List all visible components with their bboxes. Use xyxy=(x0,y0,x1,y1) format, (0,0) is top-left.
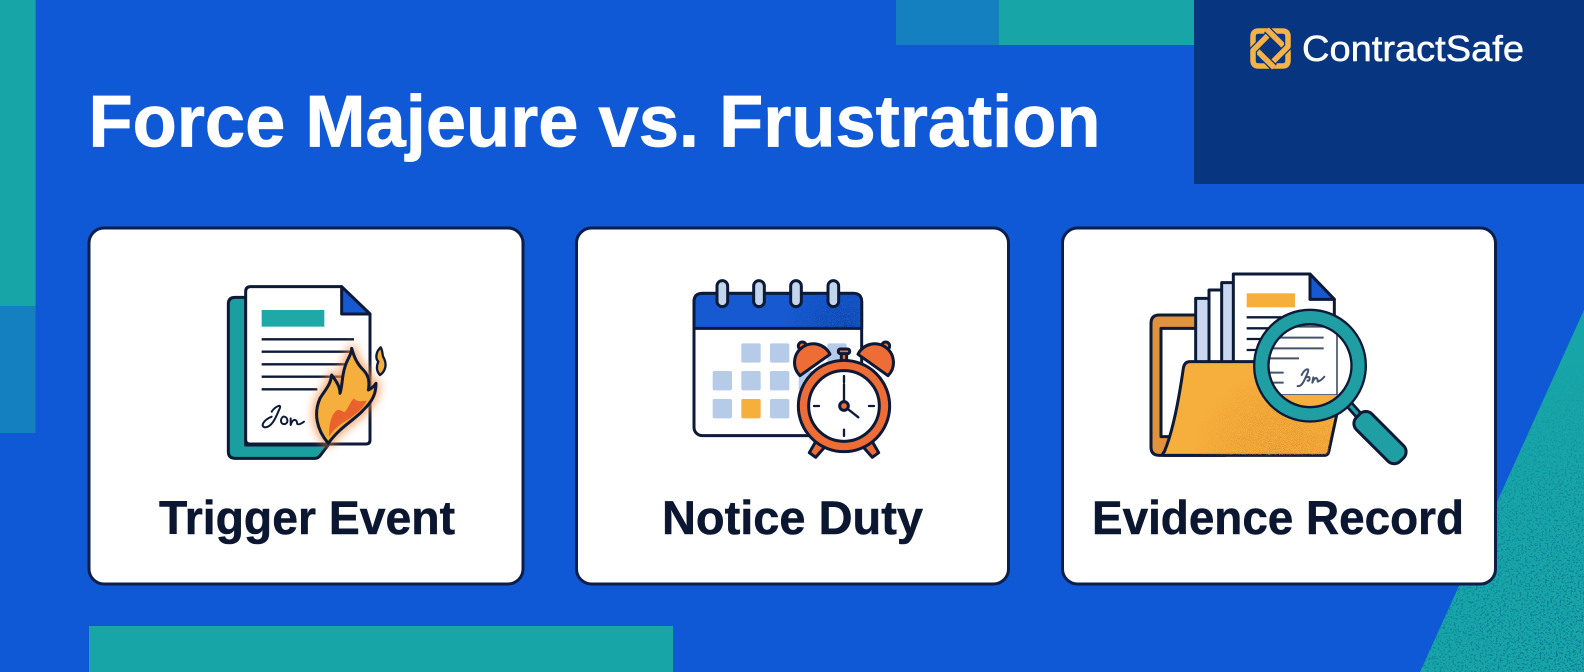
title: Force Majeure vs. Frustration xyxy=(88,82,1100,163)
icon: burning contract xyxy=(228,287,386,458)
panel: notice duty xyxy=(576,228,1008,584)
icon: folder and magnifying glass xyxy=(1151,274,1410,467)
folder front xyxy=(1163,362,1347,455)
icon: calendar and alarm clock xyxy=(694,281,893,457)
logo wordmark: ContractSafe xyxy=(1302,28,1524,69)
panel: evidence record xyxy=(1062,228,1496,584)
folder back xyxy=(1151,315,1225,455)
calendar xyxy=(694,281,862,436)
bottom colour block xyxy=(89,626,673,672)
magnifying glass xyxy=(1258,313,1410,467)
top colour blocks xyxy=(896,0,1194,45)
logo panel xyxy=(1194,0,1584,184)
label: notice duty: Notice Duty xyxy=(662,491,923,544)
left edge colour blocks xyxy=(0,0,36,433)
panel: trigger event xyxy=(89,228,523,584)
logo: ContractSafe xyxy=(1253,28,1524,69)
icon: interlocked rings xyxy=(1253,30,1288,68)
alarm clock xyxy=(795,342,893,457)
label: evidence record: Evidence Record xyxy=(1092,491,1464,544)
bottom right teal triangle xyxy=(1420,310,1584,672)
stacked papers xyxy=(1196,274,1334,378)
label: trigger event: Trigger Event xyxy=(159,491,455,544)
